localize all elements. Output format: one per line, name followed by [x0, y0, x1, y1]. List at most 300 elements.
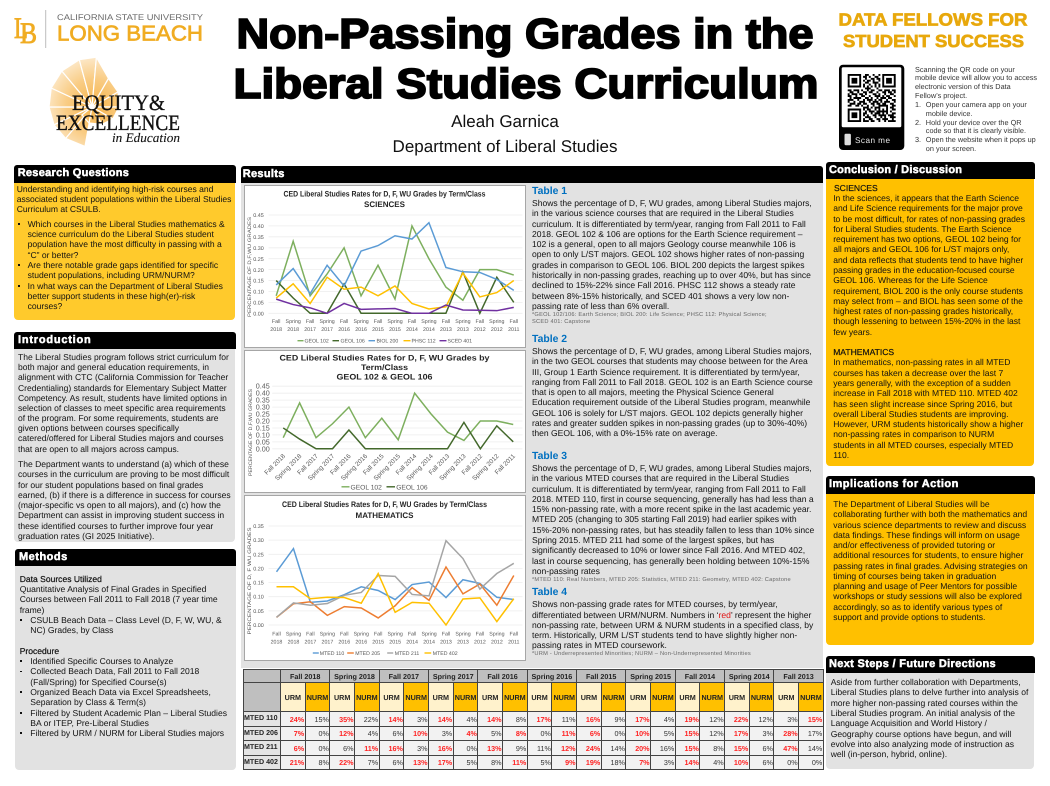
- panel: Results: curriculum. It is differentiated by term/year, ranging from Fall 2011 to Fall: [532, 484, 806, 494]
- panel: Next Steps / Future Directions: well (in-person, hybrid, online).: [831, 749, 947, 759]
- table: URM and NURM non-passing rates: 14%: [487, 715, 502, 724]
- panel: Conclusion / Discussion: students in all MTED courses, especially MTED: [833, 440, 1013, 450]
- table: URM and NURM non-passing rates: 7%: [639, 758, 650, 767]
- line chart: Mathematics: 2015: [389, 640, 401, 646]
- panel: Implications for Action: collaborating further with both the mathematics and: [833, 509, 1027, 519]
- table: URM and NURM non-passing rates: 5%: [664, 729, 674, 738]
- table: URM and NURM non-passing rates: 11%: [537, 744, 551, 753]
- line chart: Mathematics: 2012: [491, 640, 502, 646]
- line chart: Mathematics: 2015: [372, 640, 384, 646]
- table: URM and NURM non-passing rates: 10%: [635, 729, 650, 738]
- line chart: Sciences: 0.25: [253, 257, 263, 263]
- legend: MTED courses: MTED 205: [355, 651, 380, 657]
- line chart: Sciences: 2017: [321, 327, 333, 333]
- line chart: GEOL 102 and GEOL 106: Fall 2014: [394, 452, 418, 476]
- panel: Results: that is open to all majors, meeting the Physical Science General: [532, 387, 774, 397]
- line chart: Sciences: 2015: [389, 327, 400, 333]
- table: URM and NURM non-passing rates: 9%: [615, 715, 625, 724]
- panel: Methods: Methods: [19, 551, 68, 563]
- author and department: Department of Liberal Studies: [393, 136, 617, 156]
- line chart: Sciences: 0.30: [253, 246, 263, 252]
- table: URM and NURM non-passing rates: URM: [778, 692, 794, 702]
- line chart: GEOL 102 and GEOL 106: Fall 2016: [329, 452, 352, 476]
- panel: Methods: CSULB Beach Data – Class Level (D, F, W, WU, &: [30, 615, 222, 625]
- table: URM and NURM non-passing rates: Fall 2015: [586, 672, 616, 680]
- table: URM and NURM non-passing rates: 0%: [466, 744, 477, 753]
- line chart: Sciences: 2012: [473, 327, 485, 333]
- line chart: Sciences: 2018: [270, 327, 282, 333]
- line chart: GEOL 102 and GEOL 106: 0.25: [255, 409, 269, 418]
- line chart: Mathematics: 2014: [406, 640, 418, 646]
- panel: Introduction: graduation rates (GI 2025 Initiative).: [18, 531, 154, 541]
- line chart: Sciences: 0.00: [253, 312, 263, 318]
- table: URM and NURM non-passing rates: 0%: [787, 758, 798, 767]
- legend: sciences courses: PHSC 112: [411, 339, 435, 345]
- line chart: GEOL 102 and GEOL 106: 0.20: [255, 416, 269, 425]
- panel: Introduction: of the program. For some requirements, students are: [18, 413, 218, 423]
- panel: Results: Table 4: [532, 587, 567, 598]
- table: URM and NURM non-passing rates: 14%: [388, 715, 403, 724]
- panel: Results: 2018. MTED 110, first in course sequencing, generally has had less than a: [532, 494, 814, 504]
- QR instructions text: 3.: [915, 135, 921, 144]
- table: URM and NURM non-passing rates: 6%: [343, 744, 354, 753]
- panel: Conclusion / Discussion: 110.: [833, 450, 849, 460]
- table: URM and NURM non-passing rates: NURM: [307, 692, 328, 702]
- table: URM and NURM non-passing rates: NURM: [652, 692, 674, 702]
- table: URM and NURM non-passing rates: 14%: [685, 758, 699, 767]
- table: URM and NURM non-passing rates: 4%: [368, 729, 378, 738]
- line chart: GEOL 102 and GEOL 106: Spring 2018: [273, 452, 303, 482]
- panel: Results: 15%-20% non-passing rates, but has steadily fallen to less than 10% since: [532, 525, 814, 535]
- panel: Research Questions: student populations, including URM/NURM?: [28, 270, 195, 280]
- line chart: GEOL 102 and GEOL 106: Fall 2013: [427, 452, 451, 476]
- line chart: Sciences: 2016: [355, 327, 367, 333]
- table: URM and NURM non-passing rates: 5%: [540, 758, 551, 767]
- panel: Next Steps / Future Directions: Next Steps / Future Directions: [829, 658, 996, 670]
- line chart: Mathematics: 0.15: [253, 581, 263, 587]
- table: URM and NURM non-passing rates: 16%: [586, 715, 600, 724]
- panel: Introduction: Department can assist in improving student success in: [18, 510, 224, 520]
- line chart: Mathematics: Fall: [306, 632, 314, 638]
- icon: QR code with Scan me label: Scan me: [855, 136, 890, 145]
- panel: Introduction: selection of classes to meet specific area requirements: [18, 403, 226, 413]
- panel: Methods: BA or ITEP, Pre-Liberal Studies: [30, 718, 149, 728]
- legend: MTED courses: MTED 110: [319, 651, 344, 657]
- line chart: Mathematics: 2011: [508, 640, 519, 646]
- line chart: Mathematics: Spring: [489, 632, 504, 638]
- panel: Next Steps / Future Directions: Liberal Studies plans to delve further into analysis of: [831, 687, 1028, 697]
- icon: QR code with Scan me label: [839, 64, 904, 150]
- line chart: Sciences: Spring: [319, 319, 334, 325]
- table: URM and NURM non-passing rates: Spring 2014: [729, 672, 770, 680]
- table: URM and NURM non-passing rates: NURM: [455, 692, 476, 702]
- panel: Implications for Action: additional resources for students, to ensure higher: [833, 550, 1023, 560]
- line chart: Sciences: Spring: [455, 319, 470, 325]
- panel: Conclusion / Discussion: has seen slight increase since Spring 2016, but: [833, 399, 1012, 409]
- line chart: Sciences: Fall: [509, 319, 518, 325]
- legend: GEOL courses: [341, 484, 427, 491]
- QR instructions text: [915, 64, 1037, 153]
- panel: Implications for Action: support and provide options to students.: [833, 612, 985, 622]
- panel: Conclusion / Discussion: MATHEMATICS: [833, 347, 894, 357]
- table: URM and NURM non-passing rates: 13%: [487, 744, 502, 753]
- line chart: Mathematics: 0.00: [253, 623, 263, 629]
- table: URM and NURM non-passing rates: Spring 2016: [532, 672, 572, 680]
- panel: Results: 102 is a general, open to all majors Geology course meanwhile 106 is: [532, 239, 796, 249]
- line chart: Sciences: Fall: [271, 319, 280, 325]
- legend: GEOL courses: GEOL 106: [396, 484, 427, 491]
- line chart: Mathematics: Spring: [421, 632, 436, 638]
- panel: Conclusion / Discussion: highest rates of non-passing grades historically,: [833, 306, 1013, 316]
- panel: Results: curriculum. It is differentiated by term/year, ranging from Fall 2011 to Fall: [532, 219, 806, 229]
- panel: Conclusion / Discussion: and Life Science requirements for the major prove: [833, 203, 1023, 213]
- logo: Equity & Excellence in Education: [50, 58, 180, 146]
- table: URM and NURM non-passing rates: URM: [679, 692, 696, 702]
- table: URM and NURM non-passing rates: 15%: [685, 729, 699, 738]
- panel: Conclusion / Discussion: GEOL 106. Whereas for the Life Science: [833, 275, 988, 285]
- table: URM and NURM non-passing rates: 3%: [417, 715, 428, 724]
- legend: sciences courses: BIOL 200: [376, 339, 398, 345]
- line chart: Sciences: 0.15: [253, 278, 263, 284]
- line chart: GEOL 102 and GEOL 106: Fall 2012: [460, 452, 484, 476]
- panel: Results: Table 2: [532, 334, 567, 345]
- panel: Implications for Action: passing rates in final grades. Advising strategies on: [833, 561, 1028, 571]
- QR instructions text: Open your camera app on your: [926, 100, 1027, 109]
- panel: Research Questions: Understanding and identifying high-risk courses and: [17, 184, 213, 194]
- logo: CSULB Long Beach: CALIFORNIA STATE UNIVERSITY: [57, 12, 204, 22]
- line chart: Mathematics: Fall: [340, 632, 348, 638]
- table: URM and NURM non-passing rates: URM: [630, 692, 646, 702]
- legend: sciences courses: GEOL 102: [304, 339, 328, 345]
- QR instructions text: Scanning the QR code on your: [915, 64, 1015, 74]
- table: URM and NURM non-passing rates: 4%: [713, 758, 724, 767]
- line chart: Sciences: Fall: [373, 319, 382, 325]
- icon: LB monogram: L: [14, 12, 28, 45]
- table: URM and NURM non-passing rates: MTED 402: [244, 758, 278, 766]
- table: URM and NURM non-passing rates: 11%: [562, 715, 576, 724]
- table: URM and NURM non-passing rates: 16%: [388, 744, 403, 753]
- panel: Methods: NC) Grades, by Class: [30, 625, 113, 635]
- line chart: Sciences: Spring: [285, 319, 300, 325]
- line chart: Mathematics: 0.30: [253, 538, 263, 544]
- table: URM and NURM non-passing rates: 17%: [635, 715, 650, 724]
- panel: Conclusion / Discussion: overall Liberal Studies students are improving.: [833, 409, 1008, 419]
- line chart: Sciences: 0.10: [253, 290, 263, 296]
- panel: Research Questions: courses?: [28, 301, 62, 311]
- line chart: Sciences: Fall: [305, 319, 314, 325]
- table: URM and NURM non-passing rates: MTED 211: [244, 743, 278, 751]
- panel: Results: 15% non-passing rate, with a more recent spike in the last academic year.: [532, 504, 811, 514]
- panel: Methods: Filtered by Student Academic Plan – Liberal Studies: [30, 708, 227, 718]
- panel: Methods: Organized Beach Data via Excel Spreadsheets,: [30, 687, 211, 697]
- line chart: Mathematics: Fall: [407, 632, 416, 638]
- line chart: Sciences: Fall: [475, 319, 484, 325]
- panel: Next Steps / Future Directions: Liberal Studies program. An initial analysis of the: [831, 708, 1015, 718]
- table: URM and NURM non-passing rates: 21%: [290, 758, 304, 767]
- table: URM and NURM non-passing rates: MTED 110: [244, 714, 278, 722]
- panel: Introduction: Credentialing) standards for Elementary Subject Matter: [18, 383, 227, 393]
- line chart: Sciences: 0.20: [253, 268, 263, 274]
- line chart: Mathematics: Fall: [509, 632, 518, 638]
- panel: Implications for Action: The Department of Liberal Studies will be: [833, 499, 990, 509]
- panel: Results: Table 1: [532, 186, 567, 197]
- table: URM and NURM non-passing rates: 3%: [787, 715, 798, 724]
- line chart: Mathematics: 2016: [338, 640, 350, 646]
- line chart: GEOL 102 and GEOL 106: 0.05: [255, 437, 269, 446]
- panel: Conclusion / Discussion: though lessening to between 15%-20% in the last: [833, 316, 1020, 326]
- panel: Methods: Quantitative Analysis of Final Grades in Specified: [20, 584, 206, 594]
- panel: Results: differentiated between URM/NURM. Numbers in ‘red’ represent the higher: [532, 610, 811, 620]
- line chart: GEOL 102 and GEOL 106: 0.45: [255, 381, 269, 390]
- table: URM and NURM non-passing rates: 0%: [318, 729, 329, 738]
- table: URM and NURM non-passing rates: URM: [285, 692, 301, 702]
- line chart: Sciences: CED Liberal Studies Rates for D, F, WU Grades by Term/Class: [283, 190, 485, 198]
- QR instructions text: mobile device will allow you to access: [915, 73, 1037, 82]
- table: URM and NURM non-passing rates: 19%: [685, 715, 699, 724]
- panel: Conclusion / Discussion: all majors and GEOL 106 for L/ST majors only,: [833, 244, 1009, 254]
- line chart: GEOL 102 and GEOL 106: [244, 350, 526, 492]
- panel: Introduction: earned, (b) if there is a difference in success for courses: [18, 490, 231, 500]
- QR instructions text: mobile device.: [926, 109, 972, 118]
- table: URM and NURM non-passing rates: 7%: [294, 729, 304, 738]
- author and department: [393, 112, 617, 156]
- line chart: GEOL 102 and GEOL 106: 0.10: [255, 430, 269, 439]
- panel: Introduction: these identified courses to further improve four year: [18, 521, 213, 531]
- line chart: GEOL 102 and GEOL 106: Fall 2011: [493, 452, 517, 476]
- panel: Methods: (Fall/Spring) for Specified Course(s): [30, 677, 167, 687]
- panel: Introduction: (major-specific vs open to all majors), and (c) how the: [18, 500, 221, 510]
- title: [234, 10, 818, 107]
- table: URM and NURM non-passing rates: NURM: [800, 692, 822, 702]
- panel: Research Questions: Which courses in the Liberal Studies mathematics &: [28, 219, 225, 229]
- table: URM and NURM non-passing rates: 15%: [734, 744, 748, 753]
- panel: Conclusion / Discussion: SCIENCES: [834, 183, 878, 193]
- table: URM and NURM non-passing rates: 16%: [438, 744, 452, 753]
- line chart: Mathematics: Spring: [455, 632, 470, 638]
- panel: Conclusion / Discussion: requirement, BIOL 200 is the only course students: [833, 286, 1023, 296]
- table: URM and NURM non-passing rates: 8%: [713, 744, 724, 753]
- panel: Results: *URM - Underrepresented Minorities; NURM – Non-Underrepresented Minorities: [532, 651, 751, 657]
- line chart: Sciences: 2015: [372, 327, 383, 333]
- panel: Introduction: both major and general education requirements, in: [18, 362, 209, 372]
- table: URM and NURM non-passing rates: NURM: [751, 692, 772, 702]
- line chart: Mathematics: 0.25: [253, 552, 263, 558]
- table: URM and NURM non-passing rates: NURM: [701, 692, 723, 702]
- QR instructions text: 2.: [915, 118, 921, 127]
- line chart: GEOL 102 and GEOL 106: Fall 2018: [263, 452, 287, 476]
- table: URM and NURM non-passing rates: 5%: [466, 758, 477, 767]
- table: URM and NURM non-passing rates: 0%: [812, 758, 822, 767]
- panel: Results: GEOL 106 is solely for L/ST majors. GEOL 102 depicts generally higher: [532, 408, 803, 418]
- panel: Conclusion / Discussion: requirement has two options, GEOL 102 being for: [833, 234, 1021, 244]
- line chart: Mathematics: 0.10: [253, 595, 263, 601]
- panel: Implications for Action: workshops or study sessions will also be explored: [833, 591, 1022, 601]
- line chart: GEOL 102 and GEOL 106: 0.35: [255, 395, 269, 404]
- panel: Results: term. Historically, URM L/ST students tend to have slightly higher non-: [532, 630, 797, 640]
- panel: Research Questions: [14, 165, 236, 320]
- line chart: Sciences: 2016: [338, 327, 350, 333]
- line chart: GEOL 102 and GEOL 106: Fall 2015: [361, 452, 385, 476]
- table: URM and NURM non-passing rates: NURM: [405, 692, 427, 702]
- title: Liberal Studies Curriculum: [234, 60, 818, 107]
- table: URM and NURM non-passing rates: Fall 2014: [685, 672, 715, 680]
- table: URM and NURM non-passing rates: 4%: [466, 715, 477, 724]
- line chart: Sciences: 0.35: [253, 235, 263, 241]
- panel: Results: 2018. GEOL 102 & 106 are options for the Earth Science requirement –: [532, 229, 802, 239]
- table: URM and NURM non-passing rates: 9%: [565, 758, 576, 767]
- line chart: Mathematics: 2016: [355, 640, 367, 646]
- panel: Research Questions: Research Questions: [18, 167, 129, 179]
- line chart: Mathematics: 2018: [287, 640, 299, 646]
- panel: Results: in the various MTED courses that are required in the Liberal Studies: [532, 473, 789, 483]
- line chart: Mathematics: CED Liberal Studies Rates for D, F, WU Grades by Term/Class: [282, 500, 487, 509]
- line chart: Sciences: Spring: [489, 319, 504, 325]
- table: URM and NURM non-passing rates: 6%: [392, 729, 403, 738]
- line chart: GEOL 102 and GEOL 106: 0.00: [255, 444, 269, 453]
- panel: Results: Shows the percentage of D, F, WU grades, among Liberal Studies majors,: [532, 463, 812, 473]
- line chart: Mathematics: 2017: [321, 640, 333, 646]
- table: URM and NURM non-passing rates: 17%: [438, 758, 452, 767]
- table: URM and NURM non-passing rates: 14%: [438, 715, 452, 724]
- logo: Equity & Excellence in Education: EQUITY&: [72, 90, 165, 115]
- table: URM and NURM non-passing rates: Spring 2015: [630, 672, 671, 680]
- QR instructions text: Fellow’s project.: [915, 91, 967, 100]
- table: URM and NURM non-passing rates: 11%: [562, 729, 576, 738]
- panel: Results: [241, 166, 823, 668]
- table: URM and NURM non-passing rates: 3%: [417, 744, 428, 753]
- panel: Introduction: Competency. As result, students have limited options in: [18, 393, 227, 403]
- table: URM and NURM non-passing rates: Fall 2013: [783, 672, 814, 680]
- panel: Conclusion / Discussion: passing grades in the education-focused course: [833, 265, 1015, 275]
- table: URM and NURM non-passing rates: Fall 2018: [290, 672, 320, 680]
- table: URM and NURM non-passing rates: 11%: [364, 744, 378, 753]
- panel: Research Questions: Are there notable grade gaps identified for specific: [28, 260, 218, 270]
- legend: MTED courses: MTED 211: [394, 651, 419, 657]
- table: URM and NURM non-passing rates: URM: [433, 692, 449, 702]
- QR instructions text: code so that it is clearly visible.: [926, 126, 1026, 135]
- panel: Implications for Action: Implications for Action: [829, 478, 959, 490]
- panel: Results: III, Group 1 Earth Science requirement. It is differentiated by term/year,: [532, 367, 800, 377]
- panel: Results: *GEOL 102/106: Earth Science; BIOL 200: Life Science; PHSC 112: Physical Science;: [532, 312, 767, 318]
- table: URM and NURM non-passing rates: 0%: [540, 729, 551, 738]
- table: URM and NURM non-passing rates: 8%: [516, 729, 526, 738]
- panel: Conclusion / Discussion: non-passing rates in comparison to NURM: [833, 429, 994, 439]
- panel: Next Steps / Future Directions: Geography course options have begun, and will: [831, 729, 1011, 739]
- table: URM and NURM non-passing rates: 10%: [734, 758, 748, 767]
- line chart: Mathematics: 0.35: [253, 524, 263, 530]
- table: URM and NURM non-passing rates: 15%: [314, 715, 329, 724]
- line chart: GEOL 102 and GEOL 106: Spring 2015: [372, 452, 402, 482]
- panel: Results: grades in comparison to GEOL 106. BIOL 200 depicts the largest spikes: [532, 260, 805, 270]
- table: URM and NURM non-passing rates: 28%: [783, 729, 798, 738]
- panel: Implications for Action: accordingly, so as to identify various types of: [833, 602, 1002, 612]
- QR instructions text: 1.: [915, 100, 921, 109]
- table: URM and NURM non-passing rates: URM: [482, 692, 498, 702]
- line chart: Sciences: PERCENTAGE OF D,F,WU GRADES: [246, 216, 252, 317]
- table: URM and NURM non-passing rates: Fall 2016: [487, 672, 518, 680]
- panel: Results: in the various science courses that are required in the Liberal Studies: [532, 208, 794, 218]
- panel: Conclusion / Discussion: few years.: [833, 327, 872, 337]
- table: URM and NURM non-passing rates: 17%: [734, 729, 748, 738]
- table: URM and NURM non-passing rates: MTED 206: [244, 729, 278, 737]
- line chart: Mathematics: [244, 495, 526, 661]
- panel: Conclusion / Discussion: In the sciences, it appears that the Earth Science: [833, 193, 1019, 203]
- panel: Implications for Action: planning and usage of Peer Mentors for possible: [833, 581, 1017, 591]
- line chart: GEOL 102 and GEOL 106: Spring 2014: [405, 452, 435, 482]
- table: URM and NURM non-passing rates: 12%: [709, 715, 724, 724]
- line chart: Mathematics: Fall: [475, 632, 484, 638]
- line chart: Sciences: 0.45: [253, 213, 263, 219]
- panel: Results: declined to 15%-22% since Fall 2016. PHSC 112 shows a steady rate: [532, 280, 796, 290]
- table: URM and NURM non-passing rates: URM: [729, 692, 745, 702]
- panel: Results: Spring 2015. MTED 211 had some of the largest spikes, but has: [532, 535, 774, 545]
- panel: Results: passing rate of less than 6% overall.: [532, 301, 669, 311]
- panel: Results: open to only L/ST majors. GEOL 102 shows higher rates of non-passing: [532, 249, 804, 259]
- logo: CSULB Long Beach: [14, 10, 204, 50]
- panel: Introduction: [14, 332, 236, 542]
- table: URM and NURM non-passing rates: 0%: [615, 729, 625, 738]
- table: URM and NURM non-passing rates: 12%: [759, 715, 773, 724]
- panel: Conclusion / Discussion: courses has taken a decrease over the last 7: [833, 368, 1003, 378]
- panel: Methods: Data Sources Utilized: [20, 574, 102, 584]
- panel: Results: non-passing rates: [532, 566, 600, 576]
- line chart: Mathematics: PERCENTAGE OF D, F WU GRADES: [246, 527, 252, 634]
- panel: Research Questions: “C” or better?: [28, 250, 78, 260]
- logo: CSULB Long Beach: LONG BEACH: [57, 22, 203, 46]
- legend: sciences courses: [297, 339, 472, 345]
- panel: Results: last in course sequencing, has generally been holding between 10%-15%: [532, 556, 810, 566]
- line chart: Sciences: Spring: [421, 319, 436, 325]
- QR instructions text: electronic version of this Data: [915, 82, 1011, 91]
- line chart: Sciences: Fall: [441, 319, 450, 325]
- table: URM and NURM non-passing rates: NURM: [356, 692, 378, 702]
- line chart: GEOL 102 and GEOL 106: Spring 2016: [339, 452, 369, 482]
- table: URM and NURM non-passing rates: 12%: [339, 729, 354, 738]
- line chart: Sciences: 0.40: [253, 224, 263, 230]
- table: URM and NURM non-passing rates: 13%: [413, 758, 428, 767]
- panel: Methods: Identified Specific Courses to Analyze: [30, 656, 173, 666]
- panel: Introduction: The Liberal Studies program follows strict curriculum for: [18, 352, 229, 362]
- panel: Results: historically in non-passing grades, reaching up to over 40%, but has since: [532, 270, 811, 280]
- panel: Results: *MTED 110: Real Numbers, MTED 205: Statistics, MTED 211: Geometry, MTED 402: Capstone: [532, 577, 791, 583]
- table: URM and NURM non-passing rates: 10%: [413, 729, 428, 738]
- panel: Conclusion / Discussion: However, URM students historically show a higher: [833, 419, 1023, 429]
- table: URM and NURM non-passing rates: 9%: [516, 744, 526, 753]
- panel: Introduction: that are open to all majors across campus.: [18, 444, 179, 454]
- heading: Data Fellows for Student Success: DATA FELLOWS FOR: [838, 10, 1028, 30]
- panel: Methods: Collected Beach Data, Fall 2011 to Fall 2018: [30, 666, 199, 676]
- table: URM and NURM non-passing rates: 11%: [512, 758, 526, 767]
- legend: MTED courses: [312, 651, 457, 657]
- panel: Introduction: courses in the curriculum are proving to be most difficult: [18, 469, 229, 479]
- line chart: Mathematics: 2013: [440, 640, 451, 646]
- legend: sciences courses: SCED 401: [447, 339, 472, 345]
- panel: Research Questions: Curriculum at CSULB.: [17, 204, 101, 214]
- panel: Conclusion / Discussion: may select from – and BIOL has seen some of the: [833, 296, 1023, 306]
- line chart: Sciences: 2018: [287, 327, 299, 333]
- table: URM and NURM non-passing rates: [243, 669, 824, 770]
- panel: Results: Education requirement outside of the Liberal Studies program, meanwhile: [532, 397, 810, 407]
- table: URM and NURM non-passing rates: NURM: [603, 692, 624, 702]
- legend: GEOL courses: GEOL 102: [350, 484, 382, 491]
- panel: Introduction: The Department wants to understand (a) which of these: [18, 459, 229, 469]
- panel: Implications for Action: data findings. These findings will inform on usage: [833, 530, 1020, 540]
- line chart: Mathematics: 2012: [474, 640, 485, 646]
- table: URM and NURM non-passing rates: 17%: [536, 715, 551, 724]
- line chart: Mathematics: 2013: [457, 640, 468, 646]
- panel: Introduction: Introduction: [18, 334, 92, 346]
- heading: Data Fellows for Student Success: STUDENT SUCCESS: [843, 31, 1024, 51]
